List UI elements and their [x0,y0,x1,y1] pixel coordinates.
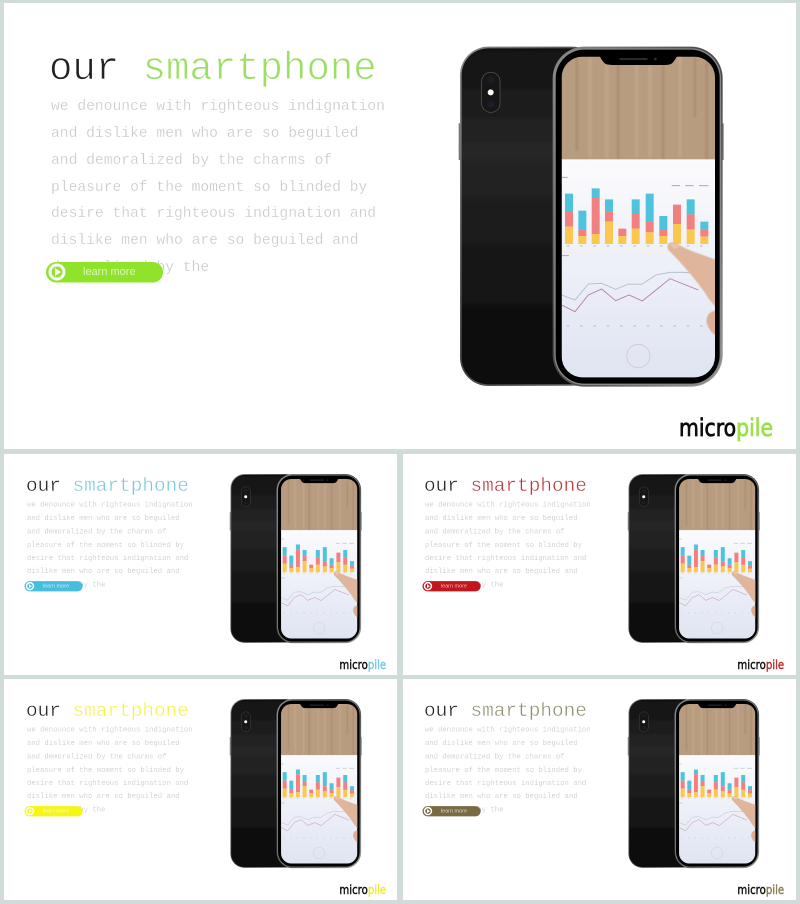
slide contents: olive [422,699,784,897]
button: learn more: learn more [441,809,467,815]
body text: pleasure of the moment so blinded by [425,542,583,550]
body text: desire that righteous indignation and [27,780,188,788]
body text: we denounce with righteous indignation [51,99,385,115]
panel: yellow slide [4,679,397,900]
body text: and dislike men who are so beguiled [425,740,578,748]
body text: and dislike men who are so beguiled [425,515,578,523]
body text: we denounce with righteous indignation [27,727,193,735]
body text: demoralized by the [27,582,105,590]
slide contents: blue [24,474,386,672]
slide contents: yellow [24,699,386,897]
body text: demoralized by the [51,260,209,276]
slide: yellow [4,679,397,900]
button: learn more [422,806,481,816]
heading: our smartphone [26,700,189,722]
button: learn more [24,581,83,591]
body text: we denounce with righteous indignation [27,502,193,510]
heading: our smartphone [424,700,587,722]
logo: micropile [737,883,784,897]
phone image [628,474,760,643]
body text: demoralized by the [27,807,105,815]
body text [51,99,385,276]
body text: and demoralized by the charms of [51,153,332,169]
slide: blue [4,454,397,675]
body text: pleasure of the moment so blinded by [27,767,185,775]
body text: dislike men who are so beguiled and [51,233,359,249]
panel: blue slide [4,454,397,675]
body text: desire that righteous indignation and [425,780,586,788]
body text: and demoralized by the charms of [425,753,565,761]
body text [425,502,591,590]
logo: micropile [339,883,386,897]
body text: and demoralized by the charms of [27,753,167,761]
body text: pleasure of the moment so blinded by [51,180,368,196]
heading: our smartphone [26,475,189,497]
slide: green [4,3,796,449]
button: learn more: learn more [83,266,136,278]
logo: micropile [339,658,386,672]
body text [425,727,591,815]
phone image [230,474,362,643]
body text: and demoralized by the charms of [27,528,167,536]
button: learn more: learn more [43,809,69,815]
slide contents: green [46,47,773,442]
logo: micropile [679,414,773,442]
body text: demoralized by the [425,807,503,815]
body text: demoralized by the [425,582,503,590]
body text: desire that righteous indignation and [51,206,376,222]
slide: red [403,454,796,675]
body text: and dislike men who are so beguiled [51,126,359,142]
body text: pleasure of the moment so blinded by [27,542,185,550]
button: learn more [24,806,83,816]
body text: we denounce with righteous indignation [425,727,591,735]
body text: dislike men who are so beguiled and [425,568,578,576]
body text: and dislike men who are so beguiled [27,740,180,748]
panel: main slide [4,3,796,449]
body text [27,727,193,815]
body text: desire that righteous indignation and [27,555,188,563]
phone image [628,699,760,868]
heading: our smartphone [49,47,377,91]
slide contents: red [422,474,784,672]
body text: dislike men who are so beguiled and [27,793,180,801]
button: learn more [422,581,481,591]
body text [27,502,193,590]
heading: our smartphone [424,475,587,497]
body text: desire that righteous indignation and [425,555,586,563]
phone image [230,699,362,868]
button: learn more: learn more [441,584,467,590]
button: learn more [46,262,163,282]
body text: pleasure of the moment so blinded by [425,767,583,775]
body text: and dislike men who are so beguiled [27,515,180,523]
slide: olive [403,679,796,900]
panel: olive slide [403,679,796,900]
logo: micropile [737,658,784,672]
button: learn more: learn more [43,584,69,590]
phone image [459,47,724,387]
body text: dislike men who are so beguiled and [425,793,578,801]
body text: and demoralized by the charms of [425,528,565,536]
body text: we denounce with righteous indignation [425,502,591,510]
body text: dislike men who are so beguiled and [27,568,180,576]
panel: red slide [403,454,796,675]
